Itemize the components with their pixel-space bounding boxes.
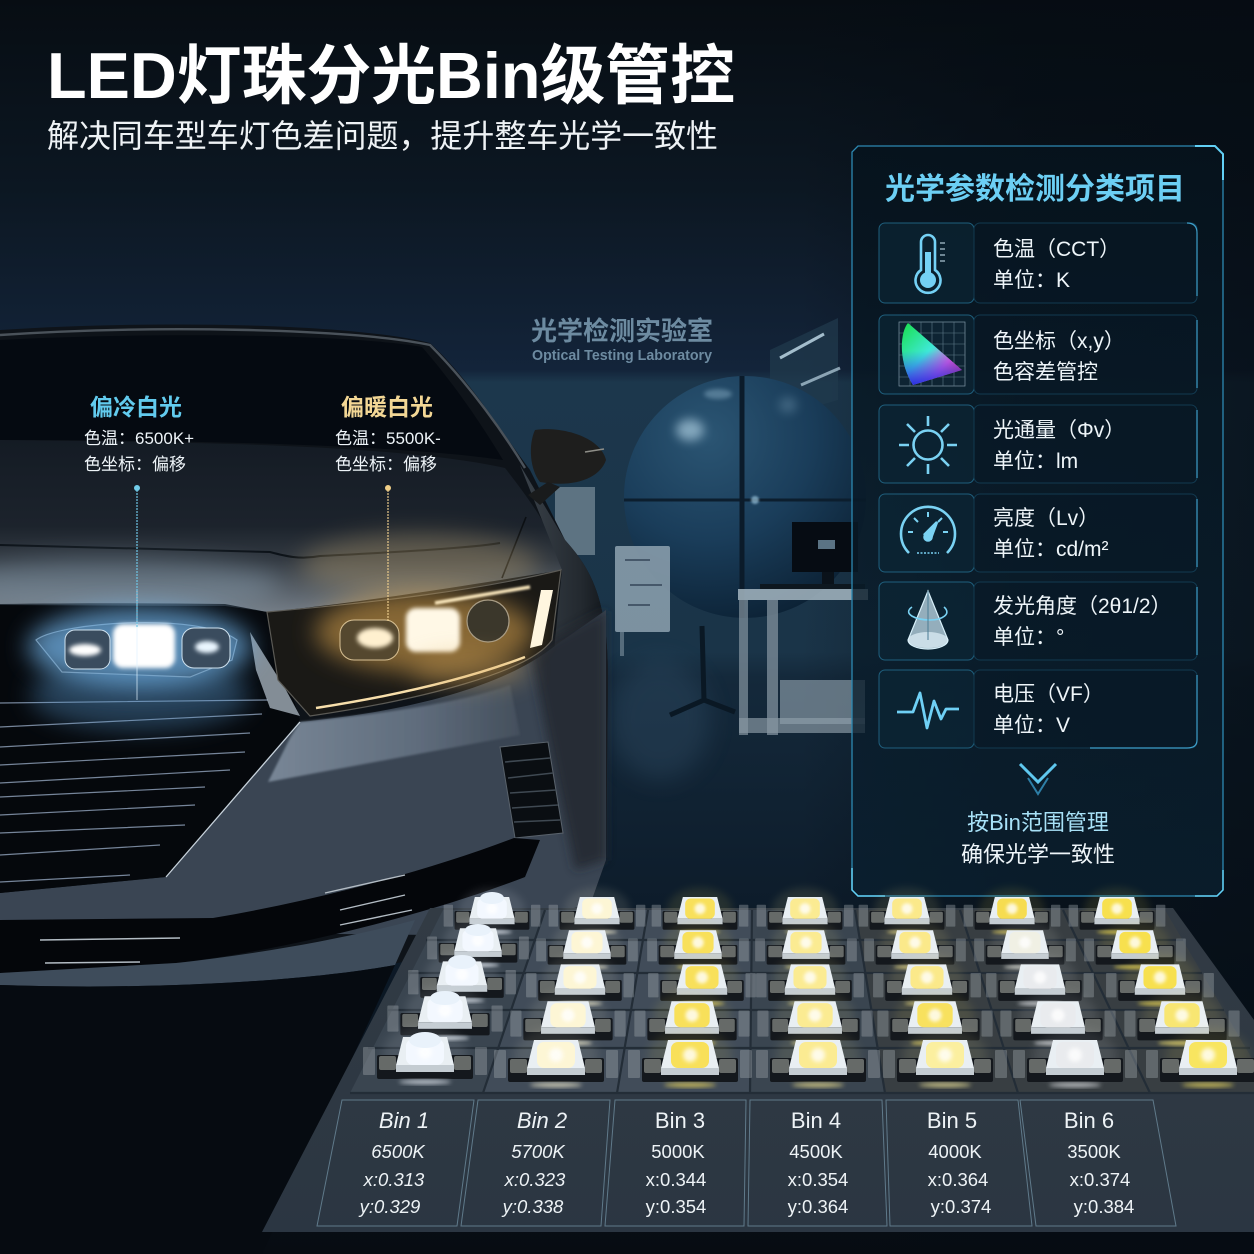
callout: cool white light: [84, 394, 194, 628]
row: color temperature: 色温（CCT）: [993, 238, 1120, 261]
tile grid: [350, 910, 1254, 1093]
row: chromaticity: [879, 315, 1197, 394]
Bin 5 label: [927, 1108, 991, 1217]
panel conclusion: [961, 810, 1115, 867]
callout: cool white light: 色温：6500K+: [84, 429, 194, 448]
lower lip: [0, 838, 540, 973]
left cool headlamp: [36, 623, 237, 677]
LED column: Bin 4 warm: [755, 888, 880, 1087]
row: emission angle: 单位：°: [993, 626, 1064, 649]
Bin 3 label: Bin 3: [655, 1108, 705, 1133]
Bin 6 label: 3500K: [1067, 1141, 1121, 1162]
Bin 2 label: x:0.323: [504, 1169, 566, 1190]
panel: optical parameter classification: [852, 146, 1223, 896]
Bin 3 label: [646, 1108, 706, 1217]
car: [0, 324, 608, 992]
icon: gauge: [901, 507, 955, 553]
panel heading: 光学参数检测分类项目: [885, 173, 1185, 206]
integrating sphere: [624, 376, 866, 715]
row: luminous flux: 光通量（Φv）: [993, 419, 1125, 442]
row: luminous flux: 单位：lm: [993, 450, 1078, 473]
LED column: Bin 2 pale warm: [494, 888, 645, 1087]
LED column: Bin 1 cool white: [363, 888, 540, 1084]
right warm headlamp: [267, 570, 561, 716]
row: chromaticity: 色容差管控: [993, 361, 1098, 384]
row: forward voltage: [879, 670, 1197, 748]
icon: thermometer: [916, 235, 945, 293]
LED column: Bin 3 yellow: [628, 888, 756, 1087]
icon: light cone: [908, 591, 948, 649]
row: luminous flux: [879, 405, 1197, 483]
callout: warm white light: 偏暖白光: [341, 394, 433, 420]
Bin 4 label: Bin 4: [791, 1108, 841, 1133]
Bin 5 label: x:0.364: [928, 1169, 988, 1190]
lab sign: Optical Testing Laboratory: [532, 347, 713, 364]
row: color temperature: [879, 223, 1197, 303]
windshield: [0, 335, 503, 460]
callout: cool white light: 偏冷白光: [90, 394, 182, 420]
Bin 6 label: x:0.374: [1070, 1169, 1130, 1190]
mirror: [531, 429, 606, 484]
grille: [0, 605, 300, 893]
board base: [262, 908, 1254, 1232]
Bin 6 label: [1064, 1108, 1134, 1217]
Bin 4 label: [788, 1108, 848, 1217]
Bin 3 label: y:0.354: [646, 1196, 706, 1217]
Bin 4 label: x:0.354: [788, 1169, 848, 1190]
Bin 3 label: 5000K: [651, 1141, 705, 1162]
Bin 2 label: Bin 2: [517, 1108, 567, 1133]
icon: CIE chromaticity diagram: [899, 322, 965, 386]
Bin 5 label: 4000K: [928, 1141, 982, 1162]
subtitle: 解决同车型车灯色差问题，提升整车光学一致性: [47, 118, 718, 154]
callout: warm white light: 色温：5500K-: [335, 429, 441, 448]
Bin 6 label: Bin 6: [1064, 1108, 1114, 1133]
panel conclusion: 确保光学一致性: [961, 842, 1115, 867]
icon: sun: [899, 416, 957, 474]
hood: [0, 440, 562, 612]
LED column: Bin 6 mixed: [964, 888, 1137, 1087]
callout: cool white light: 色坐标：偏移: [84, 455, 186, 474]
icon: voltage waveform: [897, 693, 959, 728]
lab sign: [531, 316, 713, 364]
lab sign: 光学检测实验室: [531, 316, 713, 346]
Bin 6 label: y:0.384: [1074, 1196, 1134, 1217]
LED column: Bin 5 warm: [859, 888, 1007, 1087]
LED column: rightmost: [1069, 888, 1254, 1087]
Bin 2 label: y:0.338: [501, 1196, 564, 1217]
row: color temperature: 单位：K: [993, 269, 1070, 292]
Bin 2 label: [501, 1108, 567, 1217]
row: luminance: [879, 494, 1197, 572]
Bin 1 label: Bin 1: [379, 1108, 429, 1133]
fog vent: [500, 742, 563, 838]
row: forward voltage: 单位：V: [993, 714, 1070, 737]
windshield frame: [0, 329, 525, 468]
dark floor under car: [0, 965, 395, 1254]
Bin 4 label: y:0.364: [788, 1196, 848, 1217]
row: emission angle: [879, 582, 1197, 660]
Bin 3 label: x:0.344: [646, 1169, 706, 1190]
callout: warm white light: 色坐标：偏移: [335, 455, 437, 474]
right side body: [520, 465, 608, 905]
title: LED灯珠分光Bin级管控: [47, 39, 735, 112]
row: luminance: 亮度（Lv）: [993, 507, 1099, 530]
Bin 1 label: 6500K: [371, 1141, 426, 1162]
Bin 4 label: 4500K: [789, 1141, 843, 1162]
bin cell frames: [317, 1100, 1176, 1226]
bumper: [0, 610, 606, 935]
Bin 1 label: y:0.329: [358, 1196, 420, 1217]
row: forward voltage: 电压（VF）: [993, 683, 1104, 706]
Bin 2 label: 5700K: [511, 1141, 566, 1162]
panel: LED bin board: [262, 888, 1254, 1232]
row: chromaticity: 色坐标（x,y）: [993, 330, 1125, 353]
row: luminance: 单位：cd/m²: [993, 538, 1109, 561]
row: emission angle: 发光角度（2θ1/2）: [993, 595, 1172, 618]
icon: down chevron arrow: [1020, 764, 1056, 794]
Bin 5 label: y:0.374: [931, 1196, 991, 1217]
Bin 5 label: Bin 5: [927, 1108, 977, 1133]
lab equipment and table: [555, 487, 868, 735]
Bin 1 label: [358, 1108, 429, 1217]
panel conclusion: 按Bin范围管理: [967, 810, 1109, 835]
Bin 1 label: x:0.313: [363, 1169, 425, 1190]
callout: warm white light: [335, 394, 441, 622]
